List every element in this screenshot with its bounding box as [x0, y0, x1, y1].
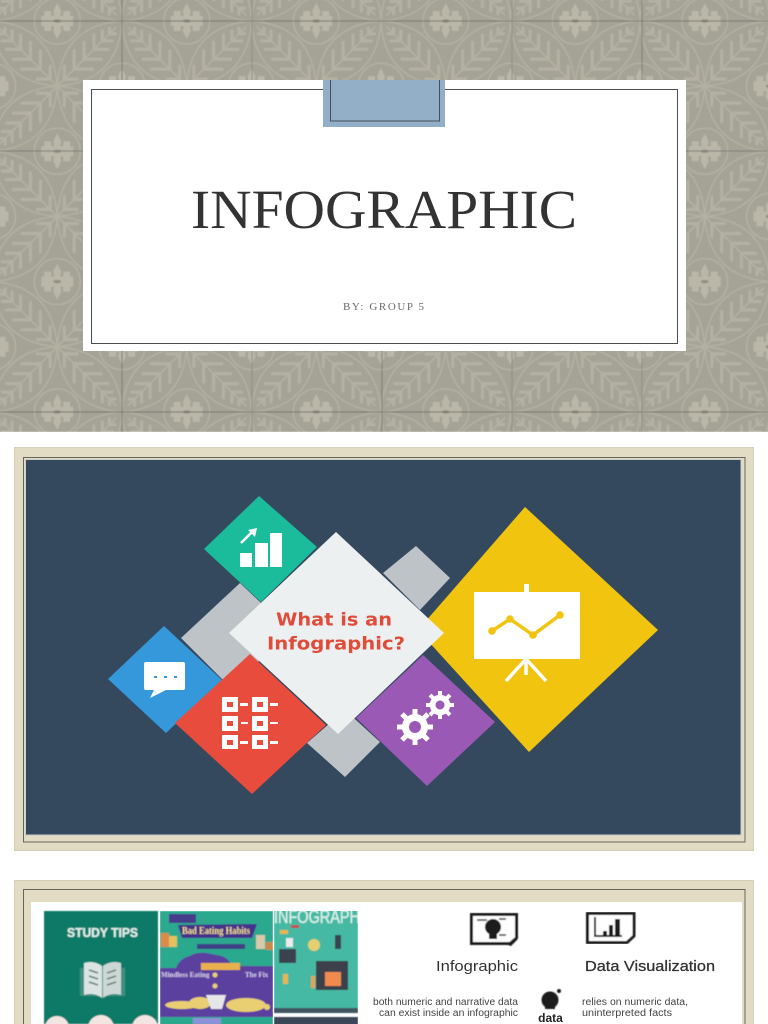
thumbnail: infographic tech — [274, 907, 360, 1024]
title: INFOGRAPHIC — [191, 179, 577, 240]
circles — [45, 1015, 158, 1024]
subtitle: BY: GROUP 5 — [343, 301, 424, 313]
bottom bands — [274, 1008, 358, 1013]
lower teal — [160, 1023, 273, 1024]
bowl — [206, 995, 226, 1009]
text: infographic description — [373, 997, 518, 1019]
heading — [267, 610, 405, 654]
orange sign — [201, 963, 240, 970]
heading: What is an — [276, 610, 392, 630]
icon: checklist grid — [222, 697, 278, 749]
icon: data visualization document — [588, 914, 634, 942]
text: infographic description: can exist inside an infographic — [379, 1008, 518, 1019]
diamond: red checklist — [175, 654, 326, 794]
patterned tile background — [0, 0, 768, 432]
diamond: green chart — [204, 496, 317, 602]
popcorn — [165, 972, 270, 1012]
banner title: Bad Eating Habits — [182, 926, 250, 937]
accents — [280, 925, 341, 988]
drinks — [161, 933, 273, 950]
cropped heading: INFOGRAPH — [274, 907, 360, 927]
section headings: The Fix — [245, 971, 269, 979]
text: data visualization description: uninterpreted facts — [582, 1008, 672, 1019]
icon: presentation board — [474, 584, 580, 681]
icon: rising bars — [240, 528, 282, 567]
dark device — [316, 961, 348, 990]
blue tab — [323, 80, 445, 127]
icon: open book — [80, 962, 125, 998]
text: data visualization description — [582, 997, 688, 1019]
section headings — [161, 971, 269, 979]
diamond: yellow presentation — [418, 507, 658, 752]
banner — [178, 924, 257, 938]
diamond: blue speech bubble — [108, 626, 222, 733]
heading: infographic: Infographic — [436, 958, 519, 975]
thumbnail: study tips — [44, 911, 158, 1024]
heading: data visualization: Data Visualization — [585, 958, 715, 975]
purple food section — [160, 953, 273, 1017]
thumbnail heading: STUDY TIPS — [67, 925, 138, 940]
heading: Infographic? — [267, 634, 405, 654]
text: infographic description: both numeric and narrative data — [373, 997, 518, 1008]
icon: speech bubble — [144, 662, 185, 698]
panel: infographic vs data visualization slide — [14, 880, 754, 1024]
slide frame — [14, 880, 754, 1024]
panel: what is an infographic slide — [14, 448, 754, 850]
icon: gears — [397, 691, 454, 745]
icon: data head — [542, 989, 561, 1009]
title card — [83, 80, 686, 351]
diamond: purple gears — [356, 655, 495, 786]
subtitle strip — [197, 944, 245, 949]
text: data visualization description: relies on numeric data, — [582, 997, 688, 1008]
slide frame — [14, 448, 754, 850]
purple tag — [169, 914, 196, 923]
diamond: central question — [229, 532, 444, 734]
small screen — [279, 949, 296, 963]
gray diamonds — [181, 546, 450, 777]
icon: infographic document — [472, 914, 517, 946]
section headings: Mindless Eating — [161, 971, 210, 979]
thumbnail: bad eating habits — [160, 911, 273, 1024]
panel: title slide — [0, 0, 768, 436]
